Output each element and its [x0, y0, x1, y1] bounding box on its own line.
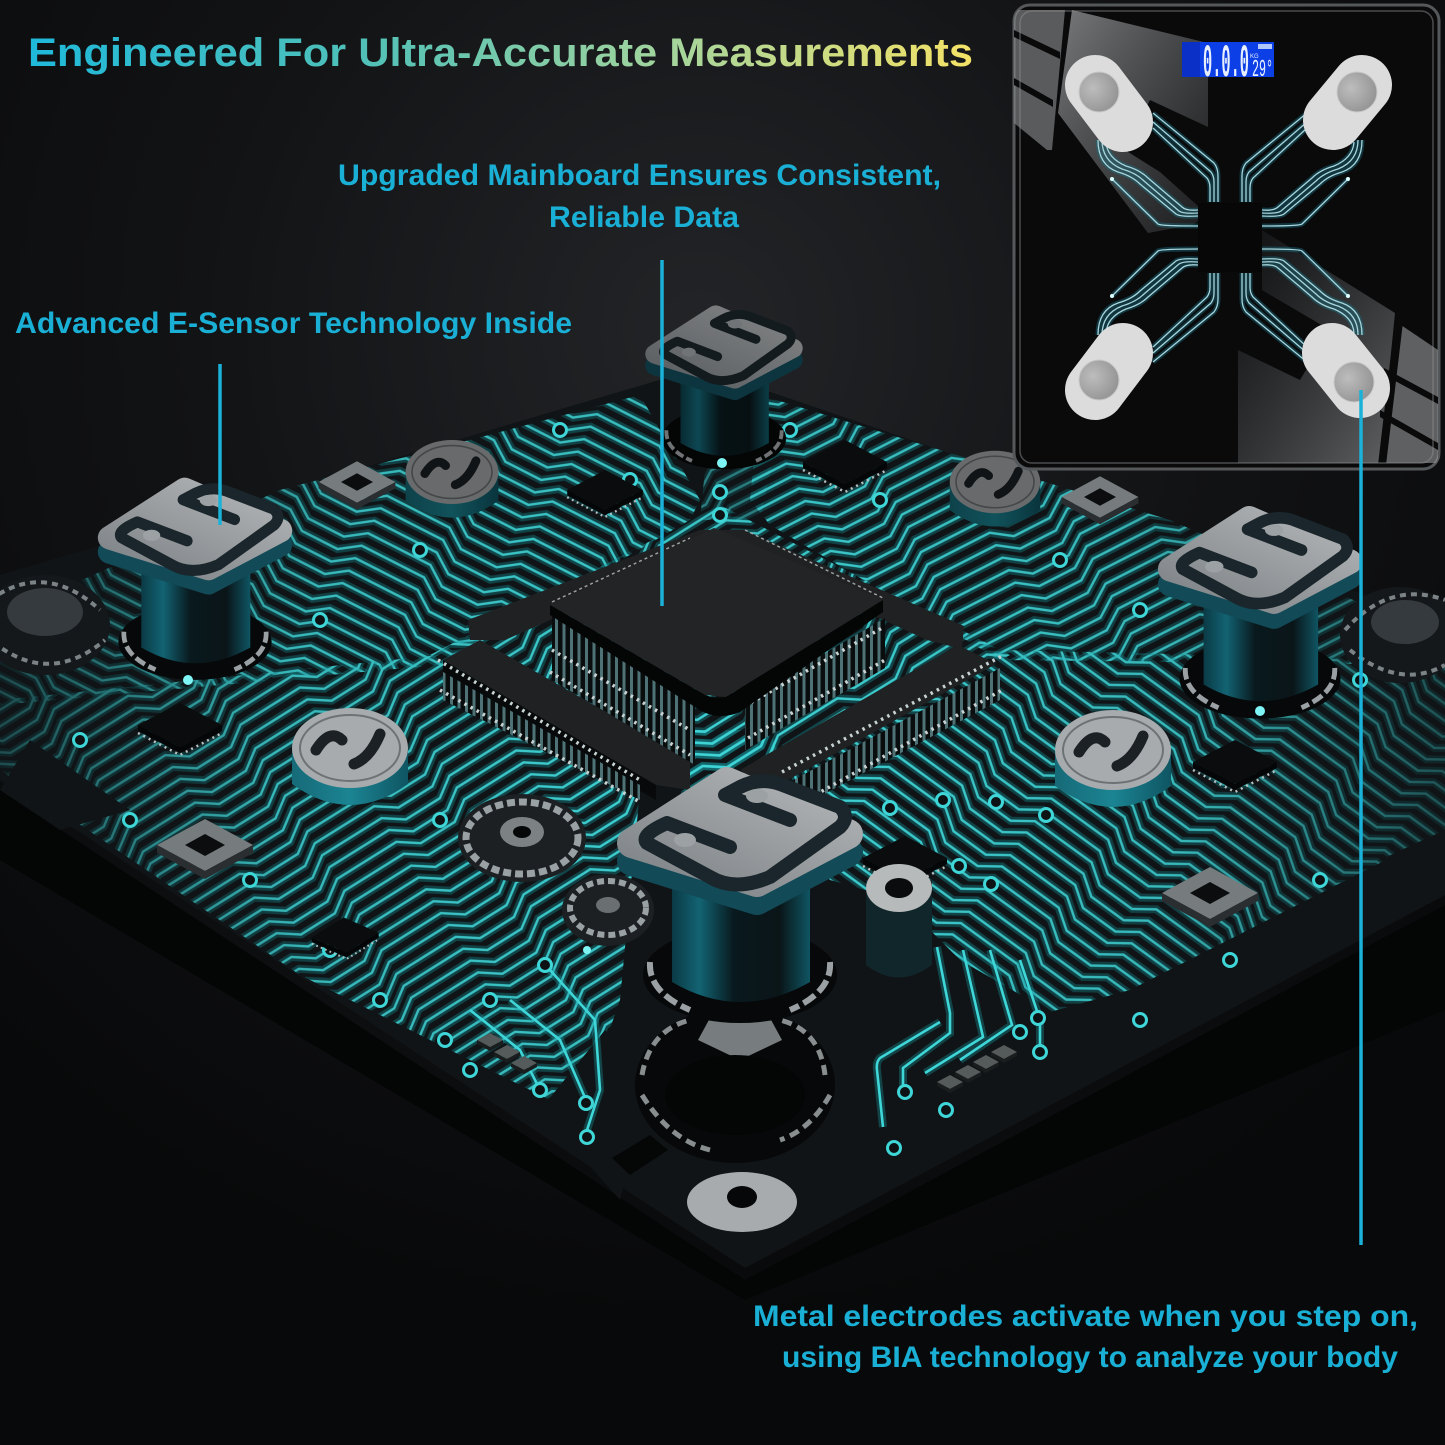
board shadow edge [0, 790, 1445, 1300]
main chip assembly [438, 528, 1002, 815]
LCD display: 29° [1252, 57, 1273, 84]
glowing indicator dots [183, 458, 1265, 954]
icon: rear mini chip and parts [138, 440, 1277, 1093]
explicit front traces [470, 947, 1040, 1130]
leader line: electrodes [1359, 390, 1363, 1245]
glass reflections [1014, 10, 1438, 465]
dark gap areas on board [0, 740, 1445, 1200]
panel: scale product photo [1014, 5, 1439, 469]
upper rear chip plate [468, 530, 964, 649]
LCD display [1182, 38, 1274, 90]
callout: e-sensor: Advanced E-Sensor Technology Inside [15, 307, 572, 340]
title: Engineered For Ultra-Accurate Measurements [28, 31, 973, 75]
main chip pins [552, 615, 695, 765]
leader line: e-sensor [218, 364, 222, 525]
circuit board [0, 368, 1445, 1300]
lower right chip bar [740, 645, 1002, 815]
electrode traces [1098, 113, 1362, 362]
main chip top [550, 528, 883, 697]
icon: mounting ring [687, 1172, 797, 1232]
teal circuit traces [0, 370, 1445, 1115]
chip block near connector [612, 1135, 668, 1175]
callout: mainboard: Upgraded Mainboard Ensures Consistent, [338, 159, 941, 192]
callout: electrodes: Metal electrodes activate when you step on, [753, 1300, 1418, 1333]
small round sensors [292, 440, 1171, 807]
chip dotted outline [552, 530, 883, 602]
load cell: left [110, 489, 280, 680]
electrode: bottom left [1079, 353, 1123, 400]
icon: gears [458, 794, 654, 946]
callout: mainboard: Reliable Data [549, 201, 739, 234]
main chip side [550, 600, 883, 716]
electrode: top left [1079, 72, 1123, 122]
load cell: rear [655, 314, 793, 469]
electrode: bottom right [1332, 353, 1374, 402]
electrode: top right [1333, 72, 1377, 120]
icon: edge domes [0, 575, 1445, 683]
board surface [0, 368, 1445, 1268]
scale rim highlight [1020, 11, 1433, 463]
icon: bottom connector [635, 1007, 835, 1163]
callout: electrodes: using BIA technology to analyze your body [782, 1341, 1398, 1374]
lower left chip bar [438, 640, 690, 802]
via pads [74, 424, 1366, 1154]
capacitor [866, 864, 932, 978]
leader line: mainboard [660, 260, 664, 606]
LCD display: KG [1250, 54, 1259, 60]
load cell: right [1170, 518, 1350, 719]
center black square [1198, 203, 1262, 272]
LCD display: 0.0.0 [1203, 38, 1249, 90]
load cell: front [632, 781, 848, 1023]
